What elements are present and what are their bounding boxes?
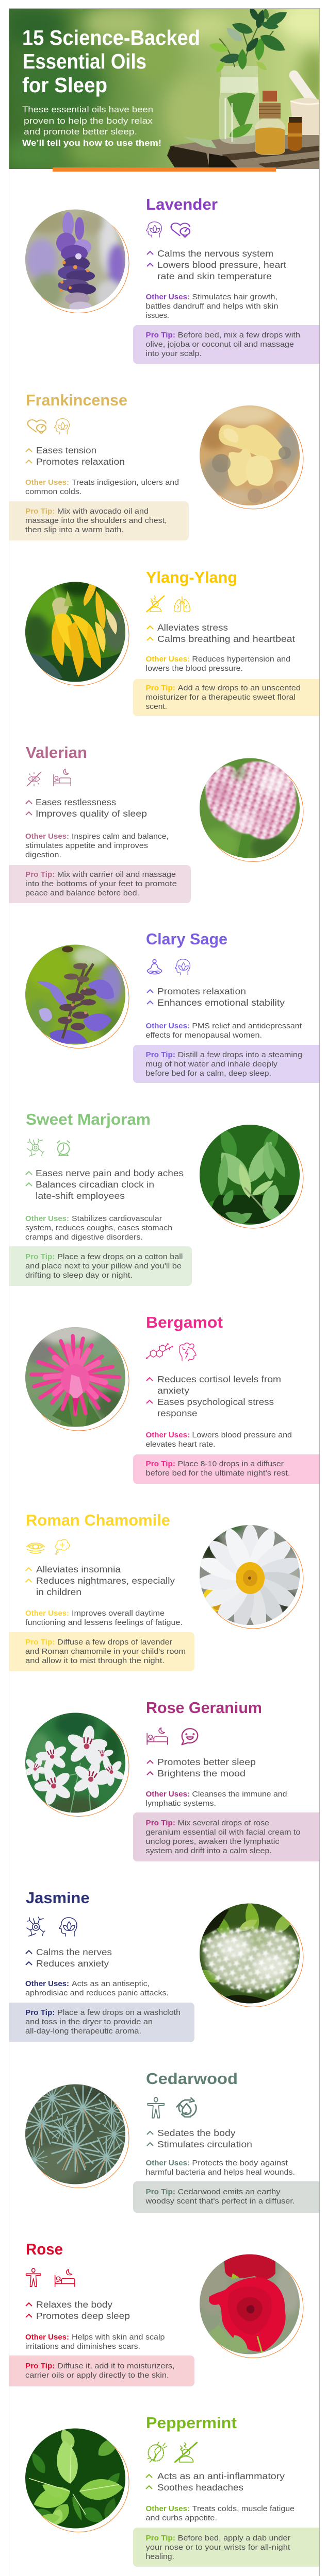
pro tip: geranium essential oil with facial cream to <box>145 1828 300 1837</box>
pro tip: and toss in the dryer to provide an <box>25 2018 153 2026</box>
other uses <box>145 2505 295 2522</box>
benefits list: anxiety <box>157 1385 189 1396</box>
pro tip: before bed for a calm, deep sleep. <box>145 1070 271 1078</box>
pro tip <box>9 501 189 540</box>
pro tip: into the bottoms of your feet to promote <box>25 880 177 888</box>
pro tip: Add a few drops to an unscented <box>178 684 301 692</box>
benefits list <box>147 248 286 281</box>
other uses: harmful bacteria and helps heal wounds. <box>145 2168 295 2177</box>
intro text: We’ll tell you how to use them! <box>22 138 161 148</box>
pro tip: Place a few drops on a cotton ball <box>57 1253 183 1261</box>
other uses: Protects the body against <box>192 2159 288 2167</box>
panel: rose <box>9 2240 303 2386</box>
icon: nerve cell <box>27 1139 44 1156</box>
pro tip: Diffuse a few drops of lavender <box>57 1638 172 1647</box>
other uses: Other Uses: <box>25 833 69 841</box>
heading: Peppermint <box>146 2414 237 2432</box>
panel: frankincense <box>9 391 303 540</box>
vase <box>219 66 259 144</box>
title: Essential Oils <box>23 49 146 73</box>
orange rule under hero <box>53 167 276 172</box>
benefits list <box>26 1168 184 1201</box>
icon: headache crossed <box>175 2443 197 2462</box>
benefits list: Lowers blood pressure, heart <box>157 260 286 270</box>
icon: eye with rings <box>27 1543 44 1553</box>
benefits list: Calms breathing and heartbeat <box>157 634 295 644</box>
other uses: Other Uses: <box>145 1431 190 1439</box>
other uses: Other Uses: <box>25 1980 69 1988</box>
pro tip <box>9 2355 194 2386</box>
benefits list: Eases restlessness <box>36 797 116 807</box>
other uses: Stimulates hair growth, <box>192 293 277 301</box>
pro tip: olive, jojoba or coconut oil and massage <box>145 341 294 349</box>
intro text: These essential oils have been <box>22 105 153 114</box>
photo: frankincense resin <box>198 404 303 509</box>
title <box>22 26 200 97</box>
pro tip: Place 8-10 drops in a diffuser <box>178 1460 284 1468</box>
other uses: battles dandruff and helps with skin <box>145 302 279 311</box>
panel: ylang-ylang <box>24 568 319 716</box>
icon: meditating figure <box>147 960 162 974</box>
pro tip: carrier oils or apply directly to the skin. <box>25 2371 169 2380</box>
benefits list: Reduces anxiety <box>36 1958 109 1969</box>
pro tip: Pro Tip: <box>145 331 175 340</box>
pro tip: Pro Tip: <box>145 2534 175 2543</box>
icon: eye crossed <box>27 772 41 786</box>
pro tip <box>9 2003 194 2042</box>
pro tip <box>133 2528 319 2567</box>
pro tip: woodsy scent that's perfect in a diffuser. <box>145 2197 295 2206</box>
benefits list: Eases nerve pain and body aches <box>36 1168 184 1178</box>
other uses: PMS relief and antidepressant <box>192 1022 302 1030</box>
benefits list: Acts as an anti-inflammatory <box>157 2471 285 2481</box>
benefits list: Promotes deep sleep <box>36 2311 130 2321</box>
icon: nerve cell <box>27 1917 45 1936</box>
benefits list <box>26 445 125 467</box>
pro tip: and allow it to mist through the night. <box>25 1657 165 1665</box>
other uses: Other Uses: <box>145 293 190 301</box>
benefits list: Enhances emotional stability <box>157 997 285 1008</box>
benefits list: Soothes headaches <box>157 2482 243 2493</box>
pro tip: massage into the shoulders and chest, <box>25 517 167 525</box>
other uses: Other Uses: <box>145 1022 190 1030</box>
benefits list: Promotes relaxation <box>36 456 125 467</box>
other uses <box>145 655 290 673</box>
pro tip <box>9 1246 192 1286</box>
pro tip: drifting to sleep day or night. <box>25 1272 133 1280</box>
other uses <box>145 1022 302 1040</box>
other uses: Other Uses: <box>145 655 190 664</box>
panel: bergamot <box>24 1313 319 1484</box>
pro tip: Pro Tip: <box>25 2009 55 2017</box>
other uses: common colds. <box>25 488 81 496</box>
photo: bee balm flower <box>24 1323 129 1431</box>
pro tip: into your scalp. <box>145 350 202 358</box>
pro tip: Place a few drops on a washcloth <box>57 2009 181 2017</box>
benefits list: rate and skin temperature <box>157 271 272 281</box>
other uses: Improves overall daytime <box>72 1609 165 1618</box>
pro tip <box>133 325 319 364</box>
other uses <box>145 2159 295 2177</box>
photo: marjoram leaves <box>198 1123 303 1229</box>
pro tip <box>133 679 319 716</box>
pro tip: Before bed, apply a dab under <box>178 2534 290 2543</box>
heading: Rose <box>26 2240 63 2258</box>
benefits list: Promotes relaxation <box>157 986 246 996</box>
benefits list: Reduces cortisol levels from <box>157 1374 281 1384</box>
other uses: Other Uses: <box>25 2333 69 2342</box>
other uses: Other Uses: <box>25 1215 69 1223</box>
other uses <box>25 2333 165 2351</box>
pro tip: Distill a few drops into a steaming <box>178 1051 302 1059</box>
pro tip: Cedarwood emits an earthy <box>178 2188 281 2196</box>
pro tip <box>133 1454 319 1484</box>
benefits list: Alleviates insomnia <box>36 1564 121 1574</box>
icon: headache crossed <box>146 596 164 612</box>
pro tip: healing. <box>145 2553 174 2561</box>
icon: head with lotus <box>59 1918 77 1936</box>
heading: Frankincense <box>26 391 127 409</box>
intro text <box>22 105 161 148</box>
other uses: functioning and lessens feelings of fatigue. <box>25 1619 183 1627</box>
panel: sweet marjoram <box>9 1110 303 1286</box>
other uses: Treats colds, muscle fatigue <box>192 2505 295 2513</box>
icon: thought cloud <box>56 1539 70 1555</box>
benefits list <box>146 2471 285 2493</box>
pro tip: Before bed, mix a few drops with <box>178 331 300 340</box>
icon: lungs <box>174 597 190 612</box>
other uses: Treats indigestion, ulcers and <box>72 479 179 487</box>
other uses: Reduces hypertension and <box>192 655 290 664</box>
benefits list: Balances circadian clock in <box>36 1179 154 1190</box>
pro tip: Pro Tip: <box>25 1253 55 1261</box>
icon: bed with moon <box>55 2269 75 2286</box>
other uses: Stabilizes cardiovascular <box>72 1215 162 1223</box>
benefits list: Reduces nightmares, especially <box>36 1575 175 1586</box>
benefits list: Alleviates stress <box>157 622 228 633</box>
other uses: elevates heart rate. <box>145 1440 216 1449</box>
photo: red rose <box>198 2252 303 2358</box>
icon: circulation cycle <box>177 2098 196 2117</box>
benefits list <box>147 622 295 644</box>
panel: cedarwood <box>21 2070 319 2213</box>
other uses: Other Uses: <box>145 2159 190 2167</box>
panel: roman chamomile <box>9 1511 304 1671</box>
other uses: Cleanses the immune and <box>192 1790 287 1799</box>
pro tip: unclog pores, awaken the lymphatic <box>145 1838 280 1846</box>
icon: alarm clock <box>57 1141 70 1156</box>
benefits list <box>26 1947 112 1969</box>
other uses: Other Uses: <box>25 479 69 487</box>
heading: Rose Geranium <box>146 1699 262 1717</box>
pro tip: Pro Tip: <box>145 1819 175 1827</box>
other uses <box>145 1431 292 1449</box>
photo: ylang-ylang flower <box>24 580 129 685</box>
heading: Clary Sage <box>146 930 227 948</box>
pro tip: system and drift into a calm sleep. <box>145 1847 272 1855</box>
other uses: Helps with skin and scalp <box>72 2333 165 2342</box>
pro tip: Pro Tip: <box>145 1460 175 1468</box>
pro tip <box>133 2181 319 2213</box>
benefits list: Stimulates circulation <box>157 2139 252 2149</box>
heading: Sweet Marjoram <box>26 1110 151 1128</box>
table <box>170 135 320 173</box>
benefits list: Eases psychological stress <box>157 1397 274 1407</box>
other uses: Acts as an antiseptic, <box>72 1980 150 1988</box>
panel: rose geranium <box>18 1699 319 1861</box>
other uses <box>25 833 169 859</box>
icon: inflamed joint <box>148 2442 167 2462</box>
other uses: stimulates appetite and improves <box>25 842 148 850</box>
other uses: Other Uses: <box>25 1609 69 1618</box>
pro tip: Pro Tip: <box>25 2362 55 2370</box>
other uses <box>25 1609 183 1627</box>
benefits list <box>147 986 285 1008</box>
pestle and mortar <box>294 75 316 106</box>
panel: jasmine <box>9 1889 303 2042</box>
other uses <box>25 1980 169 1997</box>
pro tip: peace and balance before bed. <box>25 889 139 897</box>
other uses: lowers the blood pressure. <box>145 665 243 673</box>
other uses <box>145 293 279 320</box>
other uses: Inspires calm and balance, <box>72 833 169 841</box>
benefits list <box>146 1374 281 1418</box>
intro text: and promote better sleep. <box>24 127 137 137</box>
icon: head with lotus <box>175 959 190 975</box>
benefits list: Improves quality of sleep <box>36 808 147 819</box>
pro tip: moisturizer for a therapeutic sweet floral <box>145 693 296 702</box>
pro tip <box>9 865 191 903</box>
benefits list: Brightens the mood <box>157 1768 246 1778</box>
heading: Lavender <box>146 195 218 213</box>
stems and leaves <box>219 27 274 67</box>
icon: head with lotus <box>146 222 161 237</box>
icon: body figure <box>26 2268 41 2286</box>
pro tip: Diffuse it, add it to moisturizers, <box>57 2362 175 2370</box>
photo: valerian blossoms <box>198 756 303 861</box>
icon: happy speech bubble <box>182 1728 198 1744</box>
photo: cedar needles <box>21 2079 129 2188</box>
icon: body figure <box>148 2097 164 2118</box>
benefits list: Sedates the body <box>157 2128 236 2138</box>
icon: head with lotus <box>55 419 69 434</box>
pro tip: Mix with avocado oil and <box>57 507 149 516</box>
hero photo: herbs, vase and oil bottles <box>9 9 319 169</box>
benefits list: Eases tension <box>36 445 96 455</box>
icon: cortisol molecule <box>146 1344 173 1359</box>
pro tip <box>133 1812 319 1861</box>
heading: Jasmine <box>26 1889 90 1907</box>
benefits list <box>147 2128 252 2149</box>
icon: heart gauge <box>28 420 46 433</box>
photo: lavender <box>24 208 129 313</box>
other uses: and curbs appetite. <box>145 2514 217 2522</box>
hero panel <box>0 3 327 173</box>
other uses: cramps and digestive disorders. <box>25 1233 143 1242</box>
pro tip: Pro Tip: <box>25 507 55 516</box>
heading: Valerian <box>26 743 87 761</box>
pro tip: before bed for the ultimate night’s rest. <box>145 1469 290 1478</box>
title: for Sleep <box>22 73 107 97</box>
other uses: aphrodisiac and reduces panic attacks. <box>25 1989 169 1997</box>
icon: heart gauge <box>171 223 190 237</box>
pro tip: scent. <box>145 703 167 711</box>
benefits list: Relaxes the body <box>36 2299 112 2310</box>
benefits list: Calms the nerves <box>36 1947 112 1957</box>
photo: rose geranium flowers <box>18 1711 130 1817</box>
heading: Ylang-Ylang <box>146 568 237 586</box>
icon: bed with moon <box>54 769 71 786</box>
benefits list <box>147 1757 256 1778</box>
other uses: digestion. <box>25 851 61 859</box>
panel: lavender <box>24 195 319 364</box>
heading: Cedarwood <box>146 2070 238 2088</box>
pro tip: then slip into a warm bath. <box>25 526 124 534</box>
pro tip: Mix with carrier oil and massage <box>57 871 176 879</box>
benefits list <box>26 2299 130 2321</box>
benefits list: in children <box>36 1587 81 1597</box>
pro tip: Pro Tip: <box>145 2188 175 2196</box>
benefits list: Promotes better sleep <box>157 1757 256 1767</box>
pro tip: and place next to your pillow and you'll be <box>25 1262 182 1270</box>
panel: peppermint <box>24 2414 319 2567</box>
pro tip: Mix several drops of rose <box>178 1819 269 1827</box>
benefits list <box>26 797 147 819</box>
pro tip: Pro Tip: <box>145 1051 175 1059</box>
other uses <box>145 1790 287 1808</box>
pro tip: and Roman chamomile in your child's room <box>25 1648 186 1656</box>
other uses: irritations and diminishes scars. <box>25 2343 140 2351</box>
other uses: system, reduces coughs, eases stomach <box>25 1224 172 1232</box>
pro tip: Pro Tip: <box>145 684 175 692</box>
photo: clary sage <box>24 943 129 1048</box>
pro tip: Pro Tip: <box>25 1638 55 1647</box>
other uses <box>25 1215 172 1242</box>
pro tip: your nose or to your wrists for all-night <box>145 2544 290 2552</box>
oil bottles <box>255 117 285 155</box>
icon: bed with moon <box>147 1728 168 1744</box>
other uses <box>25 479 179 496</box>
pro tip: all-day-long therapeutic aroma. <box>25 2027 141 2036</box>
panel: clary sage <box>24 930 319 1083</box>
other uses: Lowers blood pressure and <box>192 1431 292 1439</box>
benefits list: late-shift employees <box>36 1191 125 1201</box>
pro tip: Pro Tip: <box>25 871 55 879</box>
pro tip: mug of hot water and inhale deeply <box>145 1060 278 1069</box>
benefits list: Calms the nervous system <box>157 248 273 259</box>
title: 15 Science-Backed <box>22 26 200 49</box>
icon: stressed head <box>179 1343 196 1361</box>
benefits list <box>26 1564 175 1597</box>
heading: Roman Chamomile <box>26 1511 170 1529</box>
photo: jasmine blossoms <box>196 1901 303 2007</box>
heading: Bergamot <box>146 1313 223 1331</box>
photo: peppermint leaves <box>24 2427 129 2532</box>
photo: chamomile daisy <box>196 1522 304 1632</box>
intro text: proven to help the body relax <box>24 116 153 126</box>
pro tip <box>133 1045 319 1083</box>
pro tip <box>9 1632 194 1671</box>
panel: valerian <box>9 743 303 903</box>
other uses: Other Uses: <box>145 1790 190 1799</box>
other uses: effects for menopausal women. <box>145 1031 262 1040</box>
other uses: lymphatic systems. <box>145 1800 216 1808</box>
benefits list: response <box>157 1408 197 1418</box>
other uses: issues. <box>145 312 169 320</box>
other uses: Other Uses: <box>145 2505 190 2513</box>
